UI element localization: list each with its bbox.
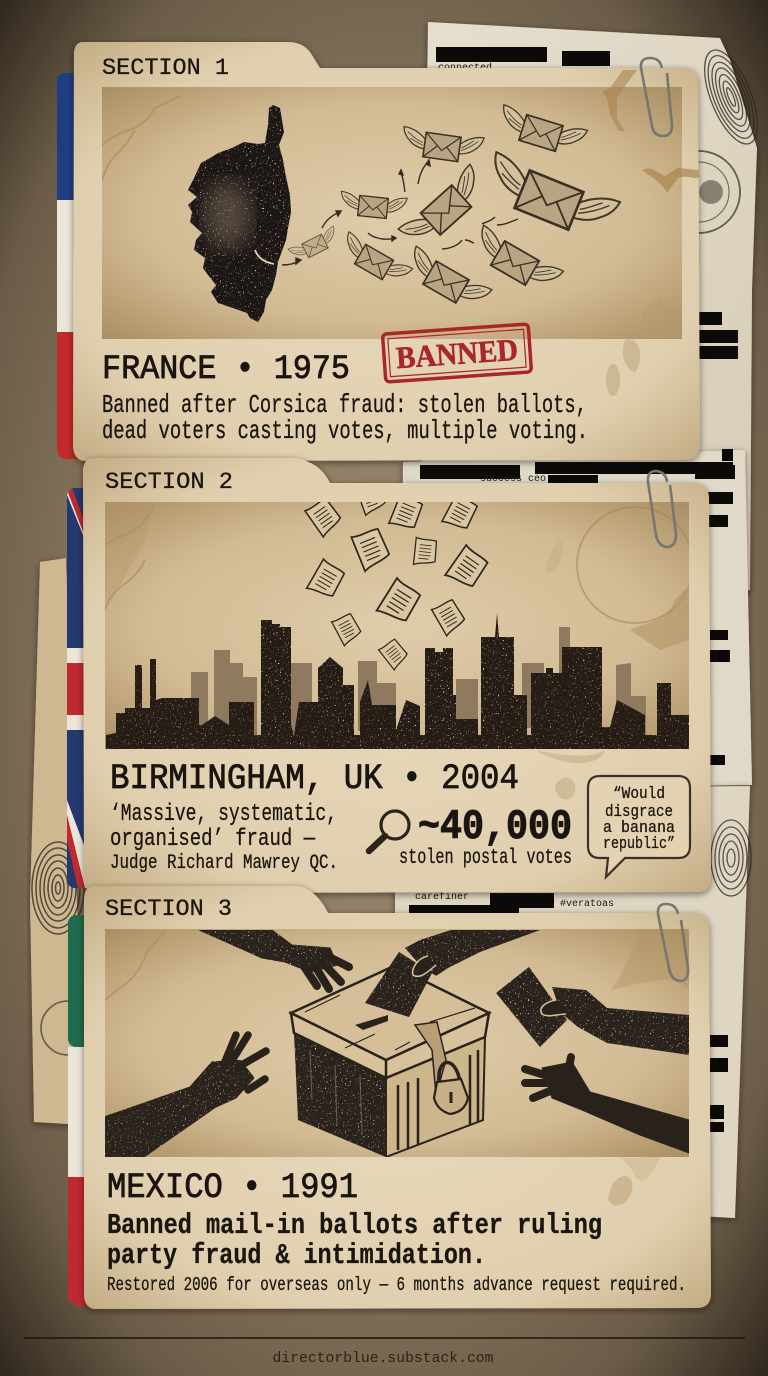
ballot box bbox=[291, 966, 489, 1157]
speech bubble: republic” bbox=[603, 835, 675, 854]
quote text: organised’ fraud — bbox=[110, 826, 315, 853]
mottled centre of the map bbox=[204, 181, 252, 249]
heading: Birmingham UK 2004: BIRMINGHAM, UK • 2004 bbox=[110, 759, 519, 799]
stat: stolen postal votes: stolen postal votes bbox=[399, 847, 572, 870]
arrows bbox=[282, 160, 518, 265]
body text: party fraud & intimidation. bbox=[107, 1239, 486, 1272]
illustration: Corsica and flying envelopes bbox=[102, 87, 682, 339]
coffee stains bbox=[602, 70, 700, 396]
icon: lower fingerprint bbox=[711, 820, 751, 896]
quote text: Judge Richard Mawrey QC. bbox=[110, 852, 338, 875]
heading: France 1975: FRANCE • 1975 bbox=[102, 351, 350, 389]
speech bubble bbox=[588, 776, 690, 877]
hand: top left bbox=[199, 930, 349, 989]
illustration: skyline with falling ballots bbox=[105, 480, 693, 749]
body text: dead voters casting votes, multiple voting. bbox=[102, 416, 588, 446]
icon: seal stamp bbox=[658, 151, 740, 233]
skyline: light buildings bbox=[191, 627, 646, 735]
stain bbox=[608, 1157, 660, 1206]
icon: upper fingerprint bbox=[694, 43, 768, 151]
stat: stolen postal votes bbox=[399, 803, 572, 870]
label: section 1: SECTION 1 bbox=[102, 55, 229, 81]
redacted bars bbox=[436, 47, 738, 359]
body text: Banned after Corsica fraud: stolen ballots, bbox=[102, 390, 587, 420]
quote text: ‘Massive, systematic, bbox=[110, 801, 337, 828]
flag: United Kingdom bbox=[67, 488, 86, 888]
icon: padlock bbox=[434, 1062, 468, 1114]
folder card bbox=[73, 42, 700, 461]
text fragment: success ceo bbox=[480, 474, 546, 485]
text fragment: carefiner bbox=[415, 891, 469, 903]
envelopes bbox=[288, 105, 620, 315]
stamp: banned bbox=[383, 324, 531, 382]
body text: Banned mail-in ballots after ruling bbox=[107, 1209, 602, 1242]
body text bbox=[102, 390, 588, 446]
flag: France bbox=[57, 73, 87, 459]
icon: paperclip bbox=[658, 904, 688, 981]
background paper: lower right document bbox=[395, 786, 751, 1218]
hand: right holding ballot bbox=[496, 967, 689, 1055]
speech bubble: “Would bbox=[613, 785, 665, 804]
speech bubble: disgrace bbox=[605, 803, 673, 822]
background paper: middle right document bbox=[400, 449, 752, 790]
icon: paperclip bbox=[641, 58, 672, 136]
hand: lower right bbox=[525, 1057, 689, 1153]
folder card bbox=[83, 458, 711, 893]
background paper: upper right document bbox=[420, 22, 768, 600]
redacted bars bbox=[409, 893, 728, 1132]
folder card bbox=[84, 886, 711, 1309]
stat: stolen postal votes: ~40,000 bbox=[418, 803, 572, 851]
label: section 3: SECTION 3 bbox=[105, 896, 232, 922]
stamp: banned: BANNED bbox=[395, 332, 519, 375]
panel: France bbox=[57, 42, 700, 461]
background paper: left document bbox=[30, 558, 95, 1125]
icon: left fingerprint bbox=[32, 842, 84, 934]
footer credit: directorblue.substack.com bbox=[272, 1350, 494, 1367]
label: section 2: SECTION 2 bbox=[105, 469, 233, 495]
icon: magnifying glass bbox=[369, 811, 409, 851]
ballot: top centre bbox=[365, 952, 432, 1017]
falling ballots bbox=[304, 502, 489, 671]
hand: top centre holding ballot bbox=[405, 930, 540, 976]
panel: Mexico bbox=[68, 886, 711, 1309]
map: Corsica silhouette bbox=[188, 105, 291, 322]
body text bbox=[107, 1209, 602, 1272]
icon: left stamp bbox=[41, 1001, 95, 1055]
hand: lower left bbox=[104, 1035, 266, 1157]
flag: Mexico bbox=[68, 915, 98, 1306]
icon: paperclip bbox=[648, 471, 676, 547]
panel: Birmingham bbox=[67, 458, 711, 893]
stain bbox=[535, 750, 605, 799]
skyline: dark buildings bbox=[106, 613, 690, 749]
white coastal curve bbox=[255, 250, 274, 264]
redacted bars bbox=[420, 449, 735, 765]
text fragment: connected bbox=[438, 62, 492, 74]
illustration: ballot box and hands bbox=[104, 929, 689, 1157]
speech bubble: a banana bbox=[603, 819, 675, 838]
heading: Mexico 1991: MEXICO • 1991 bbox=[107, 1168, 358, 1208]
quote text bbox=[110, 801, 338, 875]
text fragment: #veratoas bbox=[560, 899, 614, 910]
